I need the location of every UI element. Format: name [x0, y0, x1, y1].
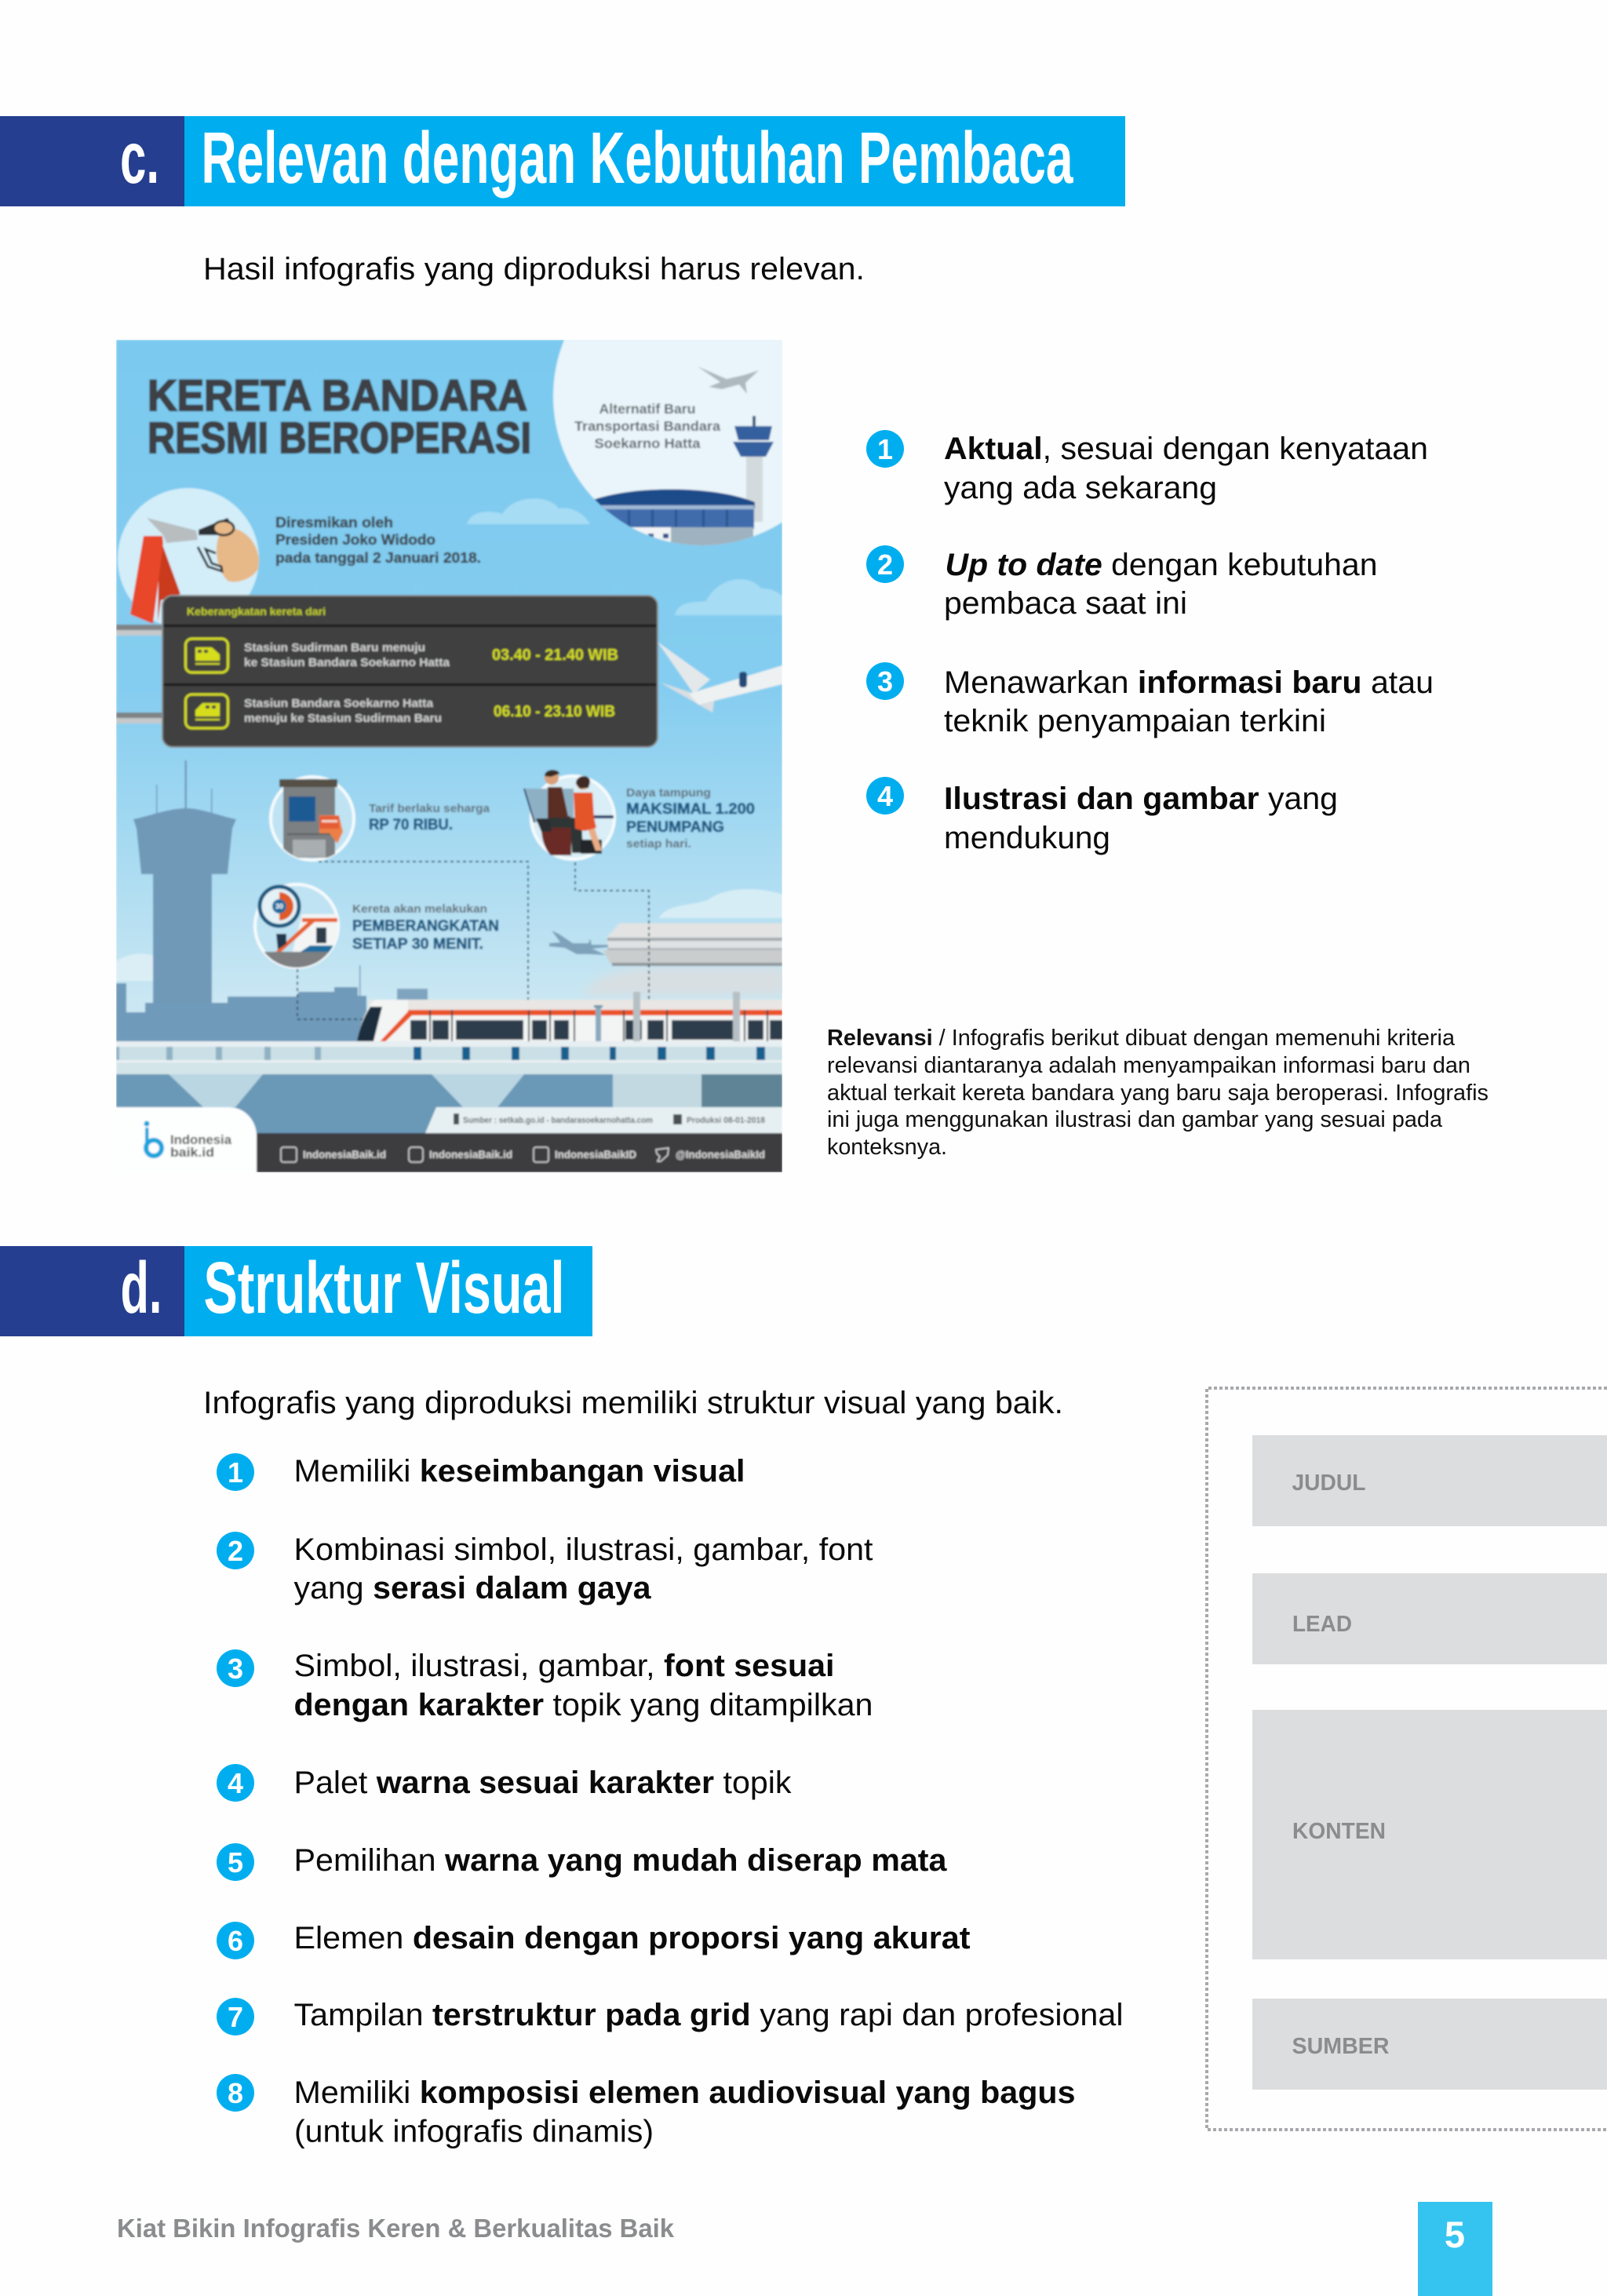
diresmikan text: Presiden Joko Widodo [275, 532, 435, 548]
item 8: (untuk infografis dinamis) [294, 2114, 654, 2148]
diresmikan text: pada tanggal 2 Januari 2018. [275, 550, 481, 566]
item 4: Ilustrasi dan gambar yang [944, 782, 1338, 816]
diresmikan text [275, 515, 481, 566]
relevansi explanation paragraph: relevansi diantaranya adalah menyampaikan informasi baru dan [827, 1053, 1470, 1078]
footer bar with social links [257, 1133, 782, 1172]
logo block [116, 1107, 257, 1172]
item 3: teknik penyampaian terkini [944, 704, 1326, 738]
train [356, 992, 782, 1042]
item 2: pembaca saat ini [944, 586, 1187, 621]
departure panel: Keberangkatan kereta dari [187, 605, 326, 618]
title: RESMI BEROPERASI [148, 413, 531, 462]
page number: 5 [1445, 2214, 1465, 2255]
route text [244, 641, 450, 725]
keberangkatan text: Kereta akan melakukan [352, 902, 487, 916]
viaduct base [116, 1074, 782, 1133]
item 4: Palet warna sesuai karakter topik [293, 1766, 793, 1800]
keberangkatan text [352, 902, 499, 953]
item 2: Kombinasi simbol, ilustrasi, gambar, font [293, 1532, 873, 1567]
city silhouette [116, 965, 366, 1044]
sumber block [1252, 1999, 1607, 2090]
departure panel [162, 596, 658, 747]
intro text c: Hasil infografis yang diproduksi harus relevan. [203, 252, 865, 286]
daya tampung text: setiap hari. [626, 837, 691, 851]
daya tampung text: Daya tampung [626, 786, 711, 800]
item 1: Memiliki keseimbangan visual [293, 1454, 745, 1489]
footer bar with social links: IndonesiaBaikID [555, 1149, 636, 1161]
pale lower clouds [116, 889, 782, 981]
times [492, 647, 618, 720]
circle: train schedule [251, 884, 341, 969]
circle caption: Transportasi Bandara [574, 418, 720, 434]
dashed connectors [297, 862, 649, 1019]
section header c: c. [120, 117, 159, 199]
panel: layout structure diagram [1207, 1388, 1607, 2130]
section header d: Struktur Visual [204, 1247, 565, 1328]
konten block: KONTEN [1292, 1819, 1386, 1844]
lead block [1252, 1573, 1607, 1664]
judul block [1252, 1435, 1607, 1526]
judul block: JUDUL [1292, 1471, 1365, 1496]
item 1: 1 [228, 1456, 243, 1489]
source strip [425, 1107, 782, 1133]
item 2 [217, 1532, 873, 1605]
route text: menuju ke Stasiun Sudirman Baru [244, 712, 442, 725]
relevansi explanation paragraph [827, 1026, 1489, 1160]
keberangkatan text: PEMBERANGKATAN [352, 918, 499, 935]
title: KERETA BANDARA [148, 370, 527, 420]
item 3: 3 [228, 1653, 243, 1685]
footer bar with social links: @IndonesiaBaikId [676, 1149, 765, 1161]
tarif text: Tarif berlaku seharga [369, 802, 490, 815]
plane silhouette [549, 931, 608, 955]
circle caption: Soekarno Hatta [595, 436, 701, 451]
title [148, 378, 530, 455]
relevansi explanation paragraph: konteksnya. [827, 1135, 947, 1160]
clouds [467, 498, 782, 615]
viaduct [116, 1041, 782, 1074]
tarif text [369, 802, 490, 833]
item 1: 1 [877, 433, 893, 465]
logo block: baik.id [170, 1145, 214, 1160]
item 2 [866, 545, 1378, 621]
circle: alternatif baru [552, 340, 782, 546]
source strip: Sumber : setkab.go.id - bandarasoekarnohatta.com [463, 1116, 653, 1125]
item 1: yang ada sekarang [944, 471, 1217, 505]
panel: sample infographic kereta bandara [116, 340, 782, 1172]
section header d [0, 1246, 592, 1336]
route text: Stasiun Bandara Soekarno Hatta [244, 697, 434, 710]
control tower silhouette [133, 760, 237, 1004]
item 7: Tampilan terstruktur pada grid yang rapi dan profesional [293, 1998, 1124, 2032]
footer bar with social links: IndonesiaBaik.id [303, 1149, 386, 1161]
icon: train 2 [185, 694, 228, 728]
item 2: 2 [228, 1535, 243, 1567]
airport tower and terminal [587, 416, 774, 546]
circle caption [574, 401, 720, 451]
item 5: Pemilihan warna yang mudah diserap mata [293, 1843, 947, 1878]
icon: train 1 [185, 639, 228, 672]
sky background [116, 340, 782, 1012]
page number [1418, 2202, 1492, 2296]
item 5: 5 [228, 1846, 243, 1879]
section header c [0, 116, 1125, 206]
door lines [429, 1010, 768, 1041]
item 4: mendukung [944, 821, 1110, 855]
item 6: 6 [228, 1925, 243, 1957]
windows [410, 1020, 782, 1040]
item 3: dengan karakter topik yang ditampilkan [293, 1688, 873, 1722]
sumber block: SUMBER [1292, 2034, 1390, 2059]
times: 03.40 - 21.40 WIB [492, 647, 618, 664]
intro text d: Infografis yang diproduksi memiliki struktur visual yang baik. [203, 1386, 1063, 1420]
item 3 [866, 662, 1434, 738]
item 2: yang serasi dalam gaya [293, 1571, 651, 1605]
item 8: 8 [228, 2077, 243, 2109]
item 2: Up to date dengan kebutuhan [945, 548, 1378, 582]
item 3 [217, 1649, 873, 1722]
konten block [1252, 1710, 1607, 1959]
item 6: Elemen desain dengan proporsi yang akurat [293, 1921, 970, 1955]
terminal building right [585, 923, 785, 995]
times: 06.10 - 23.10 WIB [494, 703, 615, 720]
item 7: 7 [228, 2001, 243, 2033]
daya tampung text: MAKSIMAL 1.200 [626, 801, 755, 818]
daya tampung text [626, 786, 755, 851]
plane small [698, 366, 759, 394]
section header d: d. [121, 1247, 162, 1328]
item 1: Aktual, sesuai dengan kenyataan [944, 432, 1428, 466]
item 4 [866, 777, 1338, 855]
footer title: Kiat Bikin Infografis Keren & Berkualitas Baik [117, 2214, 675, 2243]
item 4: 4 [877, 780, 893, 812]
list d: visual structure criteria [217, 1453, 1124, 2148]
sign support bars [116, 625, 165, 723]
item 3: Simbol, ilustrasi, gambar, font sesuai [293, 1649, 835, 1683]
scissor blades [147, 518, 198, 543]
tarif text: RP 70 RIBU. [369, 817, 453, 833]
route text: Stasiun Sudirman Baru menuju [244, 641, 425, 654]
big plane [658, 642, 782, 712]
ribbon [158, 536, 180, 622]
clock pin: 30 [275, 902, 283, 910]
poles [594, 992, 740, 1041]
route text: ke Stasiun Bandara Soekarno Hatta [244, 656, 450, 669]
source strip: Produksi 08-01-2018 [687, 1116, 765, 1125]
diresmikan text: Diresmikan oleh [275, 515, 393, 530]
item 4: 4 [228, 1767, 243, 1799]
logo block: Indonesia [170, 1132, 232, 1147]
daya tampung text: PENUMPANG [626, 819, 724, 836]
item 8: Memiliki komposisi elemen audiovisual yang bagus [293, 2076, 1075, 2110]
item 2: 2 [877, 548, 893, 581]
item 1 [866, 430, 1428, 505]
list c: relevance criteria [866, 430, 1434, 855]
section header c: Relevan dengan Kebutuhan Pembaca [201, 117, 1073, 199]
footer bar with social links: IndonesiaBaik.id [429, 1149, 512, 1161]
relevansi explanation paragraph: aktual terkait kereta bandara yang baru saja beroperasi. Infografis [827, 1081, 1489, 1106]
hand [217, 527, 259, 582]
relevansi explanation paragraph: ini juga menggunakan ilustrasi dan gambar yang sesuai pada [827, 1107, 1442, 1132]
item 8 [217, 2074, 1075, 2148]
item 3: Menawarkan informasi baru atau [944, 665, 1434, 700]
handles [199, 518, 234, 535]
circle: passengers [524, 770, 614, 859]
circle: atm [271, 777, 354, 860]
lead block: LEAD [1292, 1612, 1352, 1637]
relevansi explanation paragraph: Relevansi / Infografis berikut dibuat dengan memenuhi kriteria [827, 1026, 1455, 1051]
keberangkatan text: SETIAP 30 MENIT. [352, 936, 483, 953]
circle: scissors and ribbon [118, 488, 259, 629]
circle caption: Alternatif Baru [599, 401, 695, 417]
item 3: 3 [877, 665, 893, 698]
